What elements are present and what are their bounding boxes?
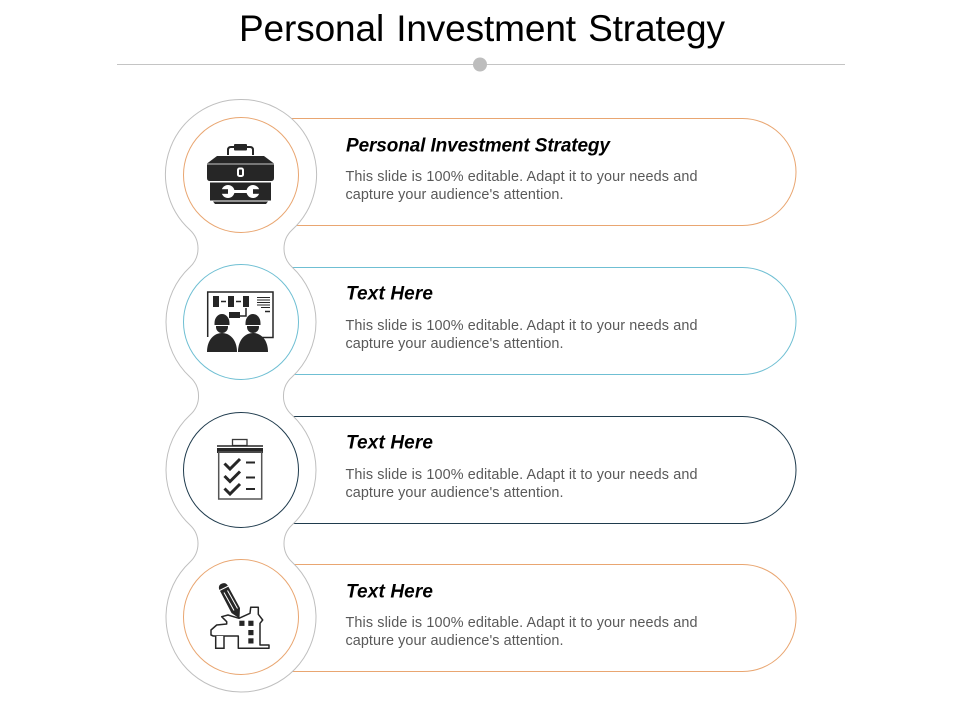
panel: text here 3: [200, 416, 796, 524]
panel: text here 3: Text Here: [346, 432, 433, 454]
title: Personal Investment Strategy: [239, 8, 726, 49]
title divider with dot: [117, 58, 845, 72]
chain outline of four joined circles: [165, 99, 317, 692]
icon: pencil over house: [211, 583, 269, 648]
panel: text here 4: capture your audience's attention.: [346, 633, 564, 649]
panel: personal investment strategy: capture your audience's attention.: [346, 187, 564, 203]
panel: text here 4: This slide is 100% editable. Adapt it to your needs and: [346, 615, 698, 631]
icon circle 4: [184, 560, 298, 674]
panel: text here 2: [200, 268, 796, 374]
panel: personal investment strategy: Personal Investment Strategy: [346, 136, 611, 156]
panel: text here 2: capture your audience's attention.: [346, 336, 564, 352]
panel: personal investment strategy: This slide is 100% editable. Adapt it to your needs and: [346, 169, 698, 185]
icon: toolbox: [207, 144, 274, 204]
icon circle 3: [184, 412, 298, 528]
panel: text here 4: Text Here: [346, 582, 433, 602]
panel: text here 2: This slide is 100% editable. Adapt it to your needs and: [346, 318, 698, 334]
panel: text here 3: capture your audience's attention.: [346, 485, 564, 501]
panel: text here 2: Text Here: [346, 284, 433, 304]
icon circle 1: [184, 118, 298, 232]
panel: text here 3: This slide is 100% editable. Adapt it to your needs and: [346, 467, 698, 483]
icon: checklist clipboard: [217, 440, 263, 499]
panel: text here 4: [200, 564, 796, 672]
icon circle 2: [184, 264, 298, 380]
icon: engineers at planning board: [207, 292, 273, 352]
panel: personal investment strategy: [200, 118, 796, 226]
